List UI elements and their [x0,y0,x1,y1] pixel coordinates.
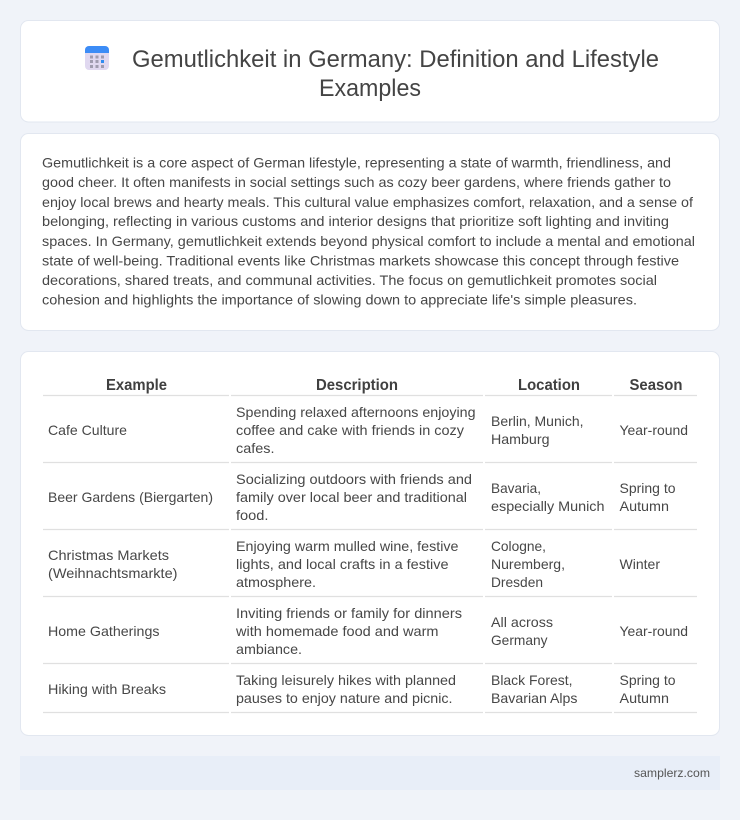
table row: christmas markets: Enjoying warm mulled wine, festive [236,538,459,554]
table row: beer gardens [48,471,676,523]
text block: definition of gemutlichkeit: state of well-being. Traditional events like Christmas markets showcase this concept through festive [42,252,679,268]
table row: home gatherings: ambiance. [236,641,302,657]
table header row: Example [106,377,167,394]
table row: beer gardens: Bavaria, [491,480,541,496]
table row: christmas markets [48,538,660,590]
title: Examples [319,75,421,102]
text block: definition of gemutlichkeit: belonging, reflecting in various customs and interior designs that prioritize soft lighting and inviting [42,213,669,229]
text block: definition of gemutlichkeit: good cheer. It often manifests in social settings such as cozy beer gardens, where friends gather to [42,174,671,190]
table row: christmas markets: Cologne, [491,538,546,554]
table row: christmas markets: Dresden [491,574,543,590]
table header row: Location [518,377,580,394]
table row: christmas markets: Winter [620,556,660,572]
footer bar [20,756,720,790]
table row: home gatherings: Inviting friends or family for dinners [236,605,462,621]
title [132,46,659,102]
table row: hiking with breaks: Spring to [620,672,676,688]
table row: hiking with breaks: Autumn [620,690,669,706]
table row: christmas markets: lights, and local crafts in a festive [236,556,449,572]
table row: cafe culture: coffee and cake with friends in cozy [236,422,464,438]
panel: examples table [20,352,720,736]
table row: hiking with breaks: Taking leisurely hikes with planned [236,672,456,688]
table row: hiking with breaks: Hiking with Breaks [48,681,166,697]
table row: home gatherings: Year-round [620,623,688,639]
table row: beer gardens: especially Munich [491,498,604,514]
table row: cafe culture: cafes. [236,440,274,456]
table row: hiking with breaks: Bavarian Alps [491,690,578,706]
panel: title header [20,20,720,122]
text block: definition of gemutlichkeit: decorations, shared treats, and communal activities. The focus on gemutlichkeit promotes social [42,272,657,288]
table header row: Season [630,377,682,394]
title: Gemutlichkeit in Germany: Definition and Lifestyle [132,46,659,73]
text block: definition of gemutlichkeit [42,154,695,308]
text block: definition of gemutlichkeit: cohesion and highlights the importance of slowing down to appreciate life's simple pleasures. [42,292,637,308]
table row: christmas markets: atmosphere. [236,574,316,590]
text block: definition of gemutlichkeit: spaces. In Germany, gemutlichkeit extends beyond physical comfort to include a mental and emotional [42,233,695,249]
table row: christmas markets: Christmas Markets [48,547,169,563]
table row: beer gardens: Beer Gardens (Biergarten) [48,489,213,505]
table row: cafe culture: Berlin, Munich, [491,413,584,429]
table row: hiking with breaks: pauses to enjoy nature and picnic. [236,690,452,706]
table row: home gatherings: All across [491,614,553,630]
table row: beer gardens: Socializing outdoors with friends and [236,471,472,487]
table row: christmas markets: (Weihnachtsmarkte) [48,565,178,581]
table header row: Description [316,377,398,394]
table row: cafe culture: Year-round [620,422,688,438]
table row: cafe culture: Cafe Culture [48,422,127,438]
footer credit: samplerz.com [634,766,710,780]
table row: home gatherings [48,605,688,657]
table row: beer gardens: Autumn [620,498,669,514]
table row: hiking with breaks [48,672,676,706]
table row: beer gardens: family over local beer and traditional [236,489,467,505]
table row: home gatherings: Germany [491,632,548,648]
table row: cafe culture [48,404,688,456]
text block: definition of gemutlichkeit: Gemutlichkeit is a core aspect of German lifestyle, representing a state of warmth, friendliness, and [42,154,671,170]
panel: intro paragraph [20,134,720,330]
table row: beer gardens: Spring to [620,480,676,496]
table row: home gatherings: with homemade food and warm [235,623,438,639]
table row: christmas markets: Nuremberg, [491,556,565,572]
table row: cafe culture: Spending relaxed afternoons enjoying [236,404,476,420]
table row: hiking with breaks: Black Forest, [491,672,572,688]
icon: calendar [85,46,109,70]
table row: cafe culture: Hamburg [491,431,550,447]
table row: home gatherings: Home Gatherings [48,623,160,639]
table row: beer gardens: food. [236,507,268,523]
text block: definition of gemutlichkeit: enjoy local brews and hearty meals. This cultural value emphasizes comfort, relaxation, and a sense of [42,194,693,210]
table header row [106,377,682,394]
